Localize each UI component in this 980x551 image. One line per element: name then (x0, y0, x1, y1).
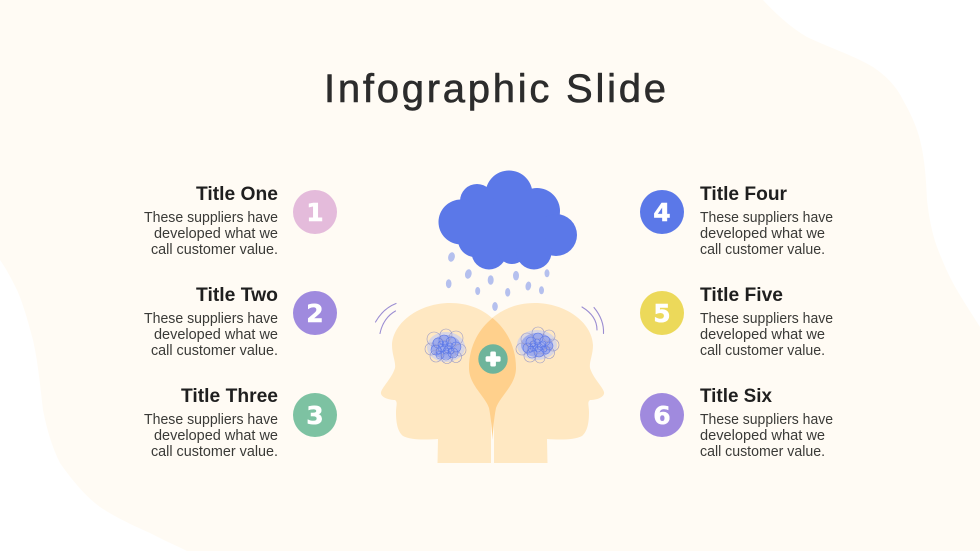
item: Title Six: 6 (653, 401, 671, 430)
item: Title Three: Title Three (181, 386, 278, 407)
right head (492, 303, 604, 463)
icon: left scribble (425, 329, 466, 364)
item: Title One: Title One (196, 184, 278, 205)
icon: rain cloud (438, 170, 577, 270)
icon: right motion lines (582, 307, 604, 334)
centre overlap (469, 318, 516, 440)
item: Title Two: These suppliers have (144, 311, 278, 327)
item: Title Three: These suppliers have (144, 412, 278, 428)
item: Title Six (640, 386, 833, 460)
item: Title Four (640, 184, 833, 258)
item: Title Five: developed what we (700, 327, 825, 343)
title: Infographic Slide (324, 67, 666, 111)
item: Title One: These suppliers have (144, 210, 278, 226)
item: Title Two: developed what we (154, 327, 278, 343)
item: Title Four: Title Four (700, 184, 788, 205)
item: Title One: call customer value. (151, 242, 278, 258)
item: Title Five: Title Five (700, 285, 783, 306)
item: Title One: 1 (306, 198, 324, 227)
item: Title One: developed what we (154, 226, 278, 242)
item: Title Three: call customer value. (151, 444, 278, 460)
item: Title Two: call customer value. (151, 343, 278, 359)
item: Title Five: 5 (653, 299, 671, 328)
item: Title Two (144, 285, 337, 359)
item: Title Three (144, 386, 337, 460)
item: Title Five (640, 285, 833, 359)
item: Title Two: 2 (306, 299, 324, 328)
icon: rain drops (446, 252, 550, 311)
item: Title Four: call customer value. (700, 242, 825, 258)
item: Title Four: 4 (653, 198, 671, 227)
item: Title Four: These suppliers have (700, 210, 833, 226)
icon: two heads (381, 303, 604, 463)
item: Title Two: Title Two (196, 285, 278, 306)
item: Title Five: These suppliers have (700, 311, 833, 327)
item: Title Three: 3 (306, 401, 324, 430)
item: Title Four: developed what we (700, 226, 825, 242)
item: Title Six: These suppliers have (700, 412, 833, 428)
plus badge (478, 344, 508, 374)
item: Title One (144, 184, 337, 258)
icon: left motion lines (376, 304, 396, 334)
item: Title Six: Title Six (700, 386, 772, 407)
item: Title Five: call customer value. (700, 343, 825, 359)
icon: right scribble (516, 327, 559, 363)
left head (381, 303, 492, 463)
item: Title Six: developed what we (700, 428, 825, 444)
item: Title Six: call customer value. (700, 444, 825, 460)
item: Title Three: developed what we (154, 428, 278, 444)
